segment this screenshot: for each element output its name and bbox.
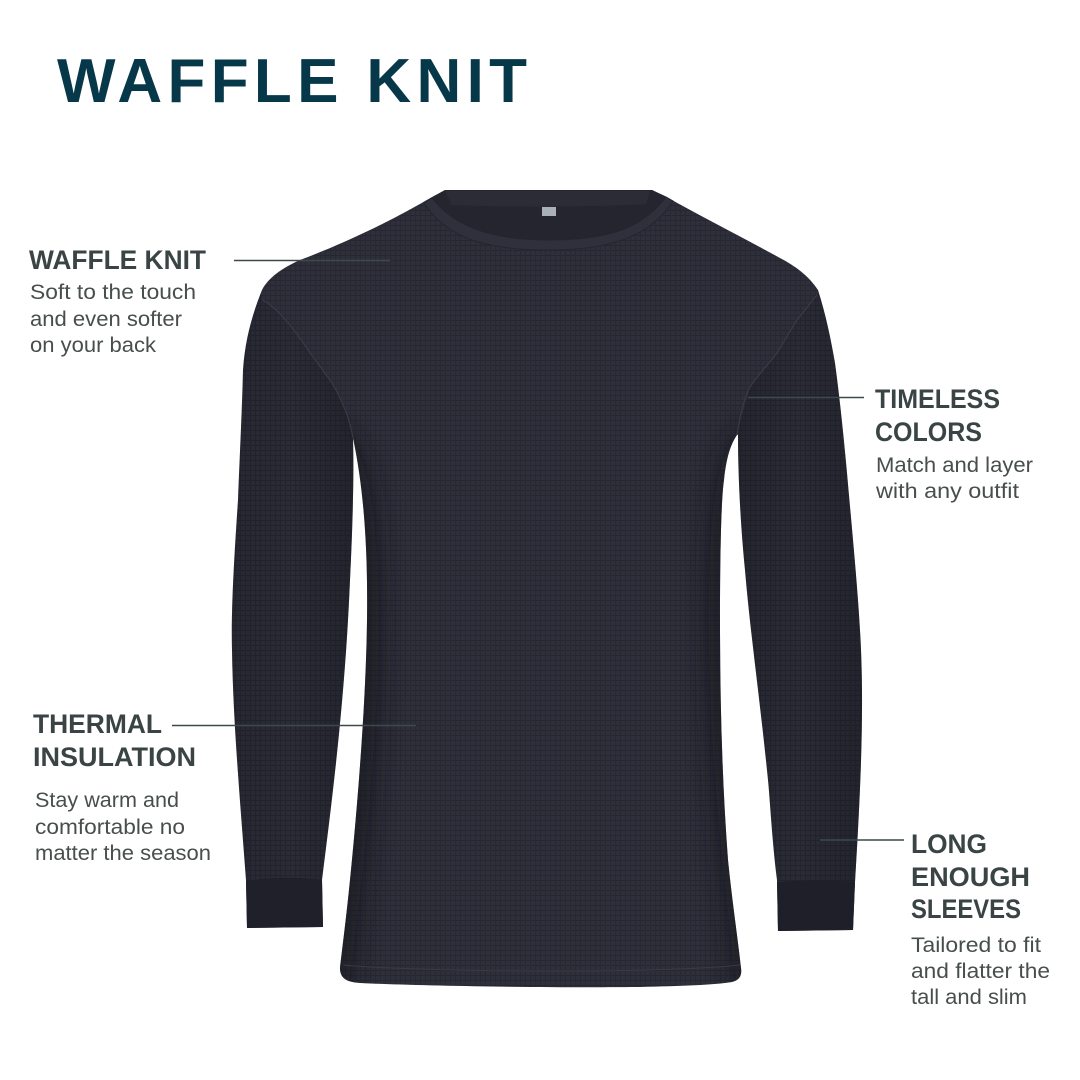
heading: COLORS [875,417,982,447]
leader line [748,396,864,398]
description [875,454,1033,503]
heading [875,384,1000,447]
description: Soft to the touch [30,281,196,304]
leader line [820,839,904,841]
heading [33,709,196,772]
heading: TIMELESS [875,384,1000,414]
collar rib [424,197,673,250]
panel: waffle knit callout [29,245,390,357]
right sleeve shading [725,290,862,882]
leader line [172,724,416,726]
heading: THERMAL [33,709,162,739]
description: with any outfit [875,480,1019,503]
heading [911,829,1030,924]
description: Match and layer [876,454,1033,477]
left cuff [246,878,323,928]
shirt photo [232,190,862,990]
description: on your back [30,334,157,357]
heading: ENOUGH [911,862,1030,892]
heading: INSULATION [33,742,196,772]
shoulder seams [262,295,817,438]
hem stitch [343,965,740,971]
leader line [234,260,390,262]
description [30,281,196,357]
neck label [542,207,556,216]
description [911,934,1050,1009]
description: tall and slim [911,986,1027,1009]
panel: thermal insulation callout [33,709,416,865]
heading: SLEEVES [911,894,1021,924]
description [35,789,211,865]
inner collar band [445,191,650,206]
body [262,190,818,987]
description: matter the season [35,842,211,865]
description: and even softer [30,308,182,331]
right sleeve [725,290,862,931]
description: Tailored to fit [911,934,1041,957]
title: WAFFLE KNIT [57,47,527,116]
heading: WAFFLE KNIT [29,245,206,275]
panel: long enough sleeves callout [820,829,1050,1009]
left sleeve shading [232,290,353,880]
right cuff [777,880,855,931]
body side shading [340,427,742,983]
heading: LONG [911,829,987,859]
left sleeve [232,290,362,928]
description: and flatter the [911,960,1050,983]
description: comfortable no [35,816,185,839]
description: Stay warm and [35,789,179,812]
panel: timeless colors callout [748,384,1033,503]
neck opening [432,190,666,240]
